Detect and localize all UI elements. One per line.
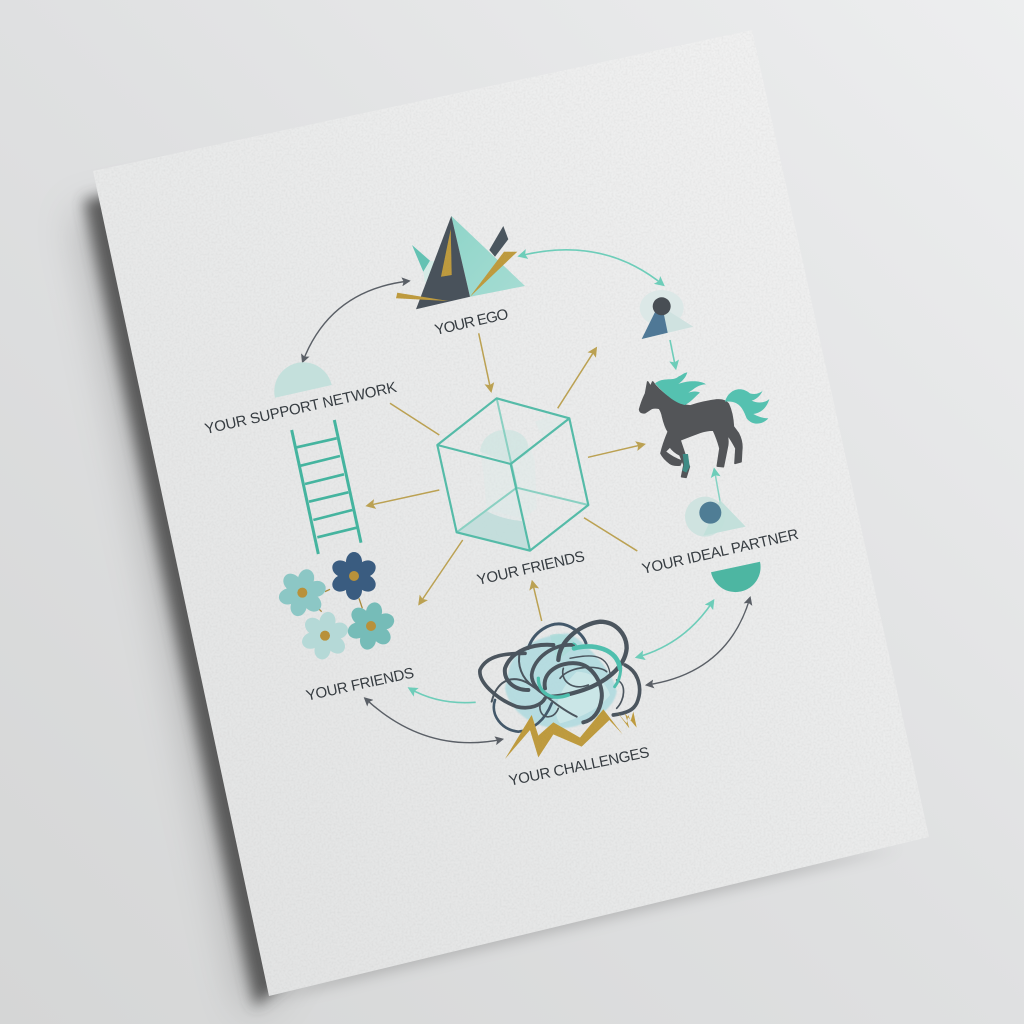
arrow: cube to ladder [367,490,439,506]
connector: support network to cube [390,403,439,435]
icon: ego pyramid [396,216,525,309]
icon: partner half disc [711,562,761,592]
label: your support network: YOUR SUPPORT NETWORK [203,379,398,438]
arrow: ego to keyhole [519,250,663,285]
label: your ideal partner: YOUR IDEAL PARTNER [640,526,800,578]
label: your challenges: YOUR CHALLENGES [507,744,651,790]
arrow: partner to challenges teal [637,601,713,657]
icon: ideal partner eye [685,497,746,537]
icon: gold lightning [505,709,637,759]
arrow: challenges to friends teal [409,688,476,703]
arrow: keyhole to horse [670,340,676,368]
icon: central cube [437,398,588,551]
connector: cube to ideal partner [584,518,637,551]
icon: horse [640,372,769,477]
arrow: cube to flowers [419,540,463,604]
arrow: support network to ego [303,281,409,362]
arrow: ego to cube [479,333,491,391]
arrow: cube to upper right [558,348,596,408]
arrow: challenges to friends label [532,582,542,621]
arrow: partner to challenges grey [647,598,750,685]
diagram [203,216,800,790]
arrow: eye to horse [714,469,721,505]
label: your friends left: YOUR FRIENDS [305,665,416,705]
icon: ladder [292,420,361,554]
paper shadow [74,190,900,1014]
paper sheet [93,30,929,996]
arrow: cube to horse [588,444,644,457]
icon: challenges scribble cloud [480,622,640,759]
label: your ego: YOUR EGO [433,306,510,339]
icon: flowers [272,552,400,664]
icon: support half disc [274,362,332,398]
icon: keyhole [640,290,693,339]
label: your friends centre: YOUR FRIENDS [475,548,586,589]
arrow: friends to challenges grey [365,698,502,743]
